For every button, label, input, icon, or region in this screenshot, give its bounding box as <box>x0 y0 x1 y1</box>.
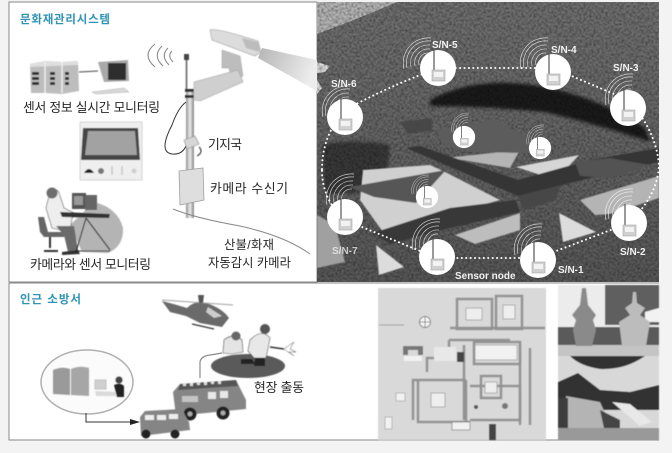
icon: operator at desk <box>38 188 123 255</box>
inner sensor node 1 <box>453 125 475 148</box>
label: camera and sensor monitoring: 카메라와 센서 모니터링 <box>30 257 151 272</box>
sensor node labels: S/N-7 <box>332 246 358 257</box>
icon: monitoring screen <box>80 122 142 180</box>
temple roofs <box>406 146 659 196</box>
sensor node S/N-2 <box>611 204 647 241</box>
icon: radio waves <box>148 44 173 67</box>
icon: surveillance camera on bracket <box>194 29 261 101</box>
sensor node wave arcs <box>322 38 633 255</box>
sensor node labels: S/N-1 <box>558 265 584 276</box>
stone pagoda <box>572 288 596 346</box>
sensor node S/N-5 <box>420 49 456 86</box>
panel: temple aerial photo with sensor nodes <box>317 2 659 282</box>
heading: nearby fire station: 인근 소방서 <box>20 293 81 306</box>
sensor node unlabelled <box>419 238 455 275</box>
sensor node labels: S/N-6 <box>331 79 357 90</box>
noise texture <box>317 2 659 282</box>
sky corner <box>317 2 397 34</box>
sensor network dotted ring <box>322 68 659 258</box>
callout line to photo <box>173 209 310 254</box>
label: camera receiver: 카메라 수신기 <box>210 181 288 196</box>
icon: base station box <box>184 136 201 156</box>
icon: hose line <box>200 353 222 378</box>
label: base station: 기지국 <box>208 137 242 152</box>
sensor node S/N-3 <box>610 89 646 126</box>
icon: camera receiver box <box>179 168 204 205</box>
panel: cultural heritage management system <box>9 2 317 282</box>
label: automatic forest fire camera: 자동감시 카메라 <box>208 256 291 270</box>
icon: small fire engine <box>140 409 190 438</box>
label: field dispatch: 현장 출동 <box>254 380 304 395</box>
icon: antenna pole <box>184 54 194 218</box>
icon: cable loop <box>165 102 186 154</box>
icon: servers linked to computer <box>30 60 129 94</box>
inner sensor node 2 <box>529 136 551 159</box>
icon: fire truck <box>173 380 246 420</box>
icon: light beam from camera <box>258 48 317 91</box>
sensor node labels: S/N-3 <box>613 63 639 74</box>
dark forest band <box>430 83 650 142</box>
sensor node S/N-1 <box>520 241 556 278</box>
sensor node S/N-7 <box>327 198 363 235</box>
sensor node labels: S/N-2 <box>620 247 646 258</box>
inner sensor node 3 <box>416 185 438 208</box>
label: automatic forest fire camera <box>208 238 291 270</box>
sensor node S/N-6 <box>327 98 363 135</box>
sensor node labels: Sensor node <box>455 271 516 282</box>
temple site plan <box>378 288 546 440</box>
mountain and temple stairs <box>558 356 659 440</box>
panel: nearby fire station <box>9 283 659 440</box>
sensor node labels: S/N-5 <box>432 40 458 51</box>
sensor node labels: S/N-4 <box>551 45 577 56</box>
icon: helicopter <box>162 295 233 329</box>
left edge white shapes <box>317 62 330 94</box>
ornate pagoda <box>619 292 650 346</box>
temple courtyards <box>317 118 659 275</box>
label: automatic forest fire camera: 산불/화재 <box>224 238 274 252</box>
icon: dispatch control center <box>41 350 133 414</box>
arrow: dispatch to fire engine <box>86 413 140 425</box>
sensor node labels <box>331 40 646 282</box>
icon: firefighters with hose <box>211 324 296 378</box>
pagoda and stone bridge photos <box>558 285 659 440</box>
label: real-time sensor monitoring: 센서 정보 실시간 모니터링 <box>23 100 160 115</box>
heading: cultural heritage management system: 문화재관리시스템 <box>20 12 110 26</box>
sensor node S/N-4 <box>535 53 571 90</box>
